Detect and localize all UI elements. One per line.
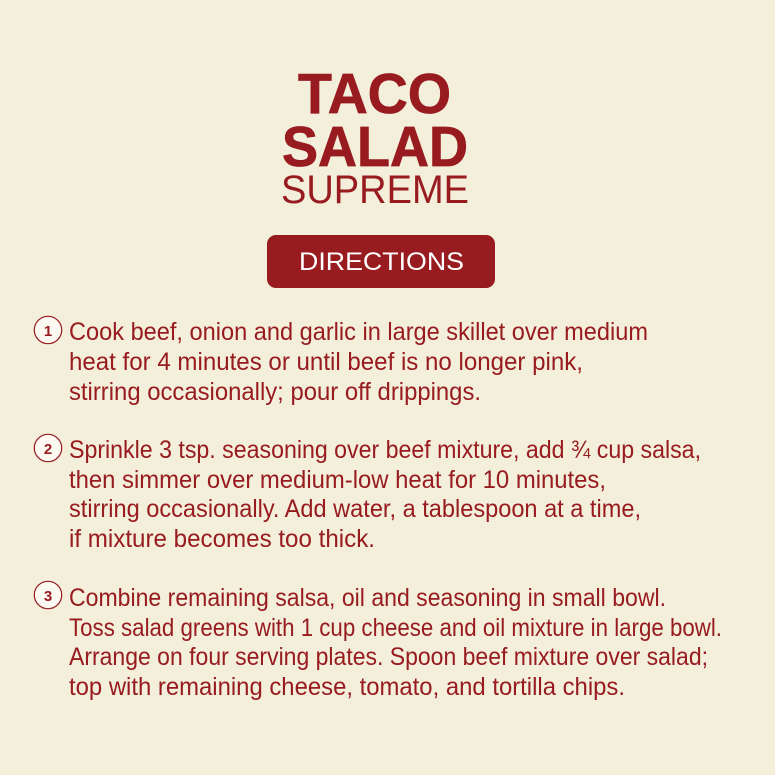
- directions badge: [267, 235, 495, 288]
- step 3 text: Arrange on four serving plates. Spoon beef mixture over salad;: [69, 643, 708, 671]
- step 2 text: if mixture becomes too thick.: [69, 525, 375, 553]
- step 1 text: Cook beef, onion and garlic in large skillet over medium: [69, 318, 648, 346]
- icon: number 2: 2: [44, 441, 52, 458]
- icon: number 1: 1: [44, 323, 52, 340]
- step 1 text: [69, 318, 648, 406]
- step 1 text: heat for 4 minutes or until beef is no longer pink,: [69, 348, 583, 376]
- icon: number 3: [34, 581, 62, 609]
- step 3 text: [69, 584, 722, 701]
- step 2 text: stirring occasionally. Add water, a tablespoon at a time,: [69, 495, 641, 523]
- step 3 text: top with remaining cheese, tomato, and tortilla chips.: [69, 673, 625, 701]
- step 2 text: then simmer over medium-low heat for 10 minutes,: [69, 466, 606, 494]
- title: [281, 62, 469, 212]
- step 1 text: stirring occasionally; pour off drippings.: [69, 378, 481, 406]
- icon: number 3: 3: [44, 588, 52, 605]
- title: TACO: [298, 62, 451, 126]
- icon: number 1: [34, 316, 62, 344]
- step 2: [34, 434, 701, 553]
- directions badge: DIRECTIONS: [299, 248, 464, 276]
- title: SALAD: [282, 115, 468, 179]
- title: SUPREME: [281, 168, 469, 212]
- step 3 text: Combine remaining salsa, oil and seasoning in small bowl.: [69, 584, 666, 612]
- step 2 text: [69, 436, 701, 553]
- step 2 text: Sprinkle 3 tsp. seasoning over beef mixture, add ¾ cup salsa,: [69, 436, 701, 464]
- icon: number 2: [34, 434, 62, 462]
- step 3: [34, 581, 722, 701]
- step 1: [34, 316, 648, 406]
